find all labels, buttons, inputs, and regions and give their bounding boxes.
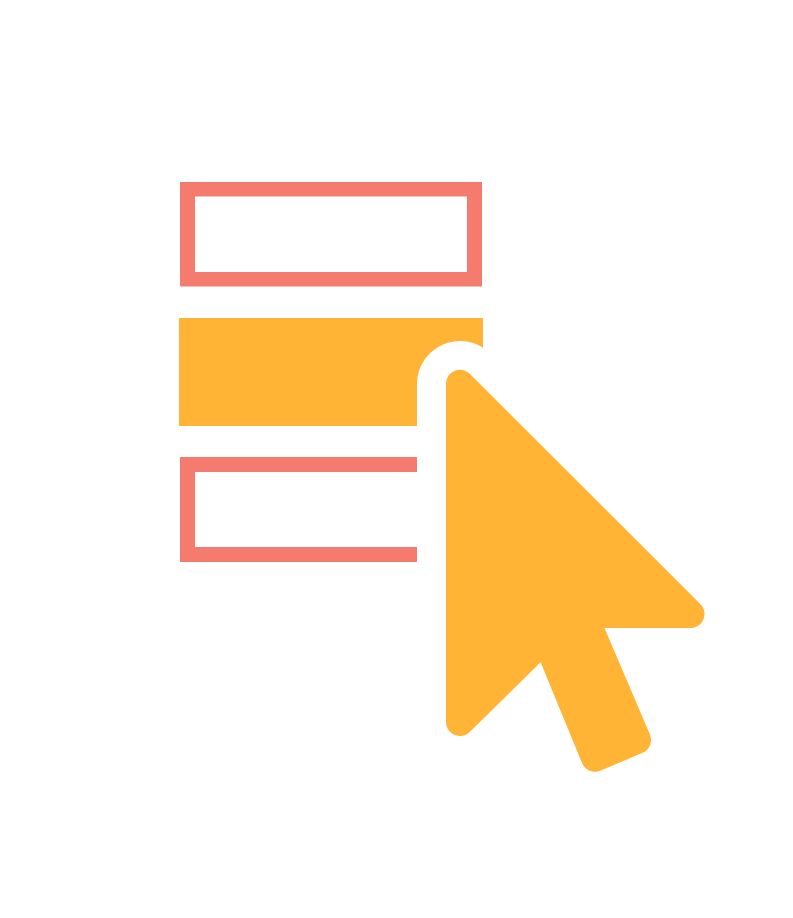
icon: cursor arrow [446,370,705,772]
icon: bottom outlined option [180,457,417,562]
icon: middle selected option [179,318,483,426]
icon: top outlined option [180,182,482,286]
